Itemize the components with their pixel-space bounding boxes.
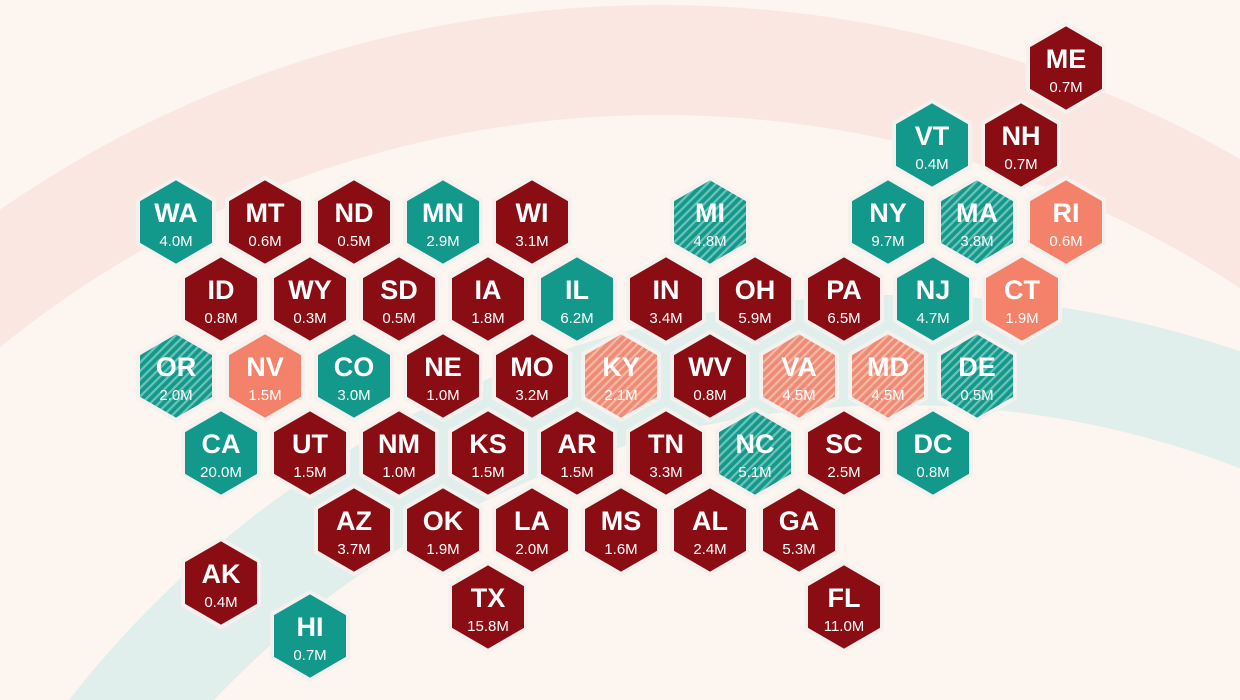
CA: CA xyxy=(202,429,240,459)
MA xyxy=(939,178,1015,266)
MA: 3.8M xyxy=(960,233,994,250)
GA: 5.3M xyxy=(782,541,816,558)
IL xyxy=(539,255,615,343)
RI: 0.6M xyxy=(1049,233,1083,250)
AK xyxy=(183,539,259,627)
NE xyxy=(405,332,481,420)
IA xyxy=(450,255,526,343)
MO: 3.2M xyxy=(515,387,549,404)
MS xyxy=(583,486,659,574)
CO: 3.0M xyxy=(337,387,371,404)
NJ xyxy=(895,255,971,343)
UT xyxy=(272,409,348,497)
MT: MT xyxy=(246,198,285,228)
MD: 4.5M xyxy=(871,387,905,404)
NJ: 4.7M xyxy=(916,310,950,327)
AK: AK xyxy=(202,559,241,589)
FL: 11.0M xyxy=(824,618,864,635)
MN: 2.9M xyxy=(426,233,460,250)
NM: NM xyxy=(378,429,420,459)
WA xyxy=(138,178,214,266)
NC: 5.1M xyxy=(738,464,772,481)
OK: OK xyxy=(423,506,464,536)
NE: 1.0M xyxy=(426,387,460,404)
ID xyxy=(183,255,259,343)
OK xyxy=(405,486,481,574)
CO: CO xyxy=(334,352,374,382)
DE: DE xyxy=(958,352,996,382)
DC xyxy=(895,409,971,497)
DE xyxy=(939,332,1015,420)
GA xyxy=(761,486,837,574)
KY xyxy=(583,332,659,420)
DC: 0.8M xyxy=(916,464,950,481)
SC: 2.5M xyxy=(827,464,861,481)
SD: 0.5M xyxy=(382,310,416,327)
WV: WV xyxy=(688,352,732,382)
LA: 2.0M xyxy=(515,541,549,558)
LA: LA xyxy=(514,506,550,536)
MI xyxy=(672,178,748,266)
MN: MN xyxy=(422,198,464,228)
TX: TX xyxy=(471,583,505,613)
TN xyxy=(628,409,704,497)
IN xyxy=(628,255,704,343)
MN xyxy=(405,178,481,266)
WY xyxy=(272,255,348,343)
NE: NE xyxy=(424,352,462,382)
IN: 3.4M xyxy=(649,310,683,327)
WI xyxy=(494,178,570,266)
MA: MA xyxy=(956,198,998,228)
WY: 0.3M xyxy=(293,310,327,327)
RI: RI xyxy=(1052,198,1080,228)
RI xyxy=(1028,178,1104,266)
NY: 9.7M xyxy=(871,233,905,250)
TX xyxy=(450,563,526,651)
DC: DC xyxy=(914,429,952,459)
MT: 0.6M xyxy=(248,233,282,250)
MS: 1.6M xyxy=(604,541,638,558)
CT: 1.9M xyxy=(1005,310,1039,327)
MI: MI xyxy=(695,198,725,228)
PA xyxy=(806,255,882,343)
SC: SC xyxy=(825,429,863,459)
AZ xyxy=(316,486,392,574)
VT: 0.4M xyxy=(915,156,949,173)
NC: NC xyxy=(736,429,774,459)
NV: 1.5M xyxy=(248,387,282,404)
NY: NY xyxy=(869,198,907,228)
IA: IA xyxy=(474,275,502,305)
NC xyxy=(717,409,793,497)
AL: 2.4M xyxy=(693,541,727,558)
VA: VA xyxy=(781,352,817,382)
TX: 15.8M xyxy=(467,618,509,635)
OH: 5.9M xyxy=(738,310,772,327)
HI xyxy=(272,592,348,680)
AR: AR xyxy=(558,429,596,459)
NY xyxy=(850,178,926,266)
SC xyxy=(806,409,882,497)
MT xyxy=(227,178,303,266)
KS xyxy=(450,409,526,497)
IN: IN xyxy=(652,275,680,305)
WA: 4.0M xyxy=(159,233,193,250)
AZ: AZ xyxy=(336,506,372,536)
OK: 1.9M xyxy=(426,541,460,558)
OH: OH xyxy=(735,275,775,305)
ID: 0.8M xyxy=(204,310,238,327)
VA: 4.5M xyxy=(782,387,816,404)
TN: TN xyxy=(648,429,684,459)
ME: ME xyxy=(1046,44,1086,74)
ME: 0.7M xyxy=(1049,79,1083,96)
CO xyxy=(316,332,392,420)
VT xyxy=(894,101,970,189)
NH: NH xyxy=(1002,121,1040,151)
hex map of states xyxy=(138,24,1104,680)
WV: 0.8M xyxy=(693,387,727,404)
VA xyxy=(761,332,837,420)
MO xyxy=(494,332,570,420)
WV xyxy=(672,332,748,420)
WY: WY xyxy=(288,275,332,305)
AR xyxy=(539,409,615,497)
NH xyxy=(983,101,1059,189)
MS: MS xyxy=(601,506,641,536)
LA xyxy=(494,486,570,574)
ME xyxy=(1028,24,1104,112)
NH: 0.7M xyxy=(1004,156,1038,173)
KY: KY xyxy=(602,352,640,382)
NM xyxy=(361,409,437,497)
OR xyxy=(138,332,214,420)
IL: IL xyxy=(565,275,589,305)
MD: MD xyxy=(867,352,909,382)
CT xyxy=(984,255,1060,343)
MI: 4.8M xyxy=(693,233,727,250)
VT: VT xyxy=(915,121,950,151)
MD xyxy=(850,332,926,420)
UT: UT xyxy=(292,429,328,459)
NV xyxy=(227,332,303,420)
DE: 0.5M xyxy=(960,387,994,404)
ID: ID xyxy=(208,275,234,305)
AR: 1.5M xyxy=(560,464,594,481)
FL: FL xyxy=(828,583,860,613)
UT: 1.5M xyxy=(293,464,327,481)
WA: WA xyxy=(154,198,198,228)
AZ: 3.7M xyxy=(337,541,371,558)
GA: GA xyxy=(779,506,819,536)
CT: CT xyxy=(1004,275,1040,305)
ND: ND xyxy=(334,198,374,228)
HI: 0.7M xyxy=(293,647,327,664)
ND xyxy=(316,178,392,266)
MO: MO xyxy=(510,352,554,382)
AL: AL xyxy=(692,506,728,536)
CA: 20.0M xyxy=(200,464,242,481)
TN: 3.3M xyxy=(649,464,683,481)
KS: 1.5M xyxy=(471,464,505,481)
CA xyxy=(183,409,259,497)
IA: 1.8M xyxy=(471,310,505,327)
KY: 2.1M xyxy=(604,387,638,404)
PA: PA xyxy=(826,275,862,305)
NV: NV xyxy=(246,352,284,382)
WI: WI xyxy=(516,198,548,228)
KS: KS xyxy=(469,429,507,459)
WI: 3.1M xyxy=(515,233,549,250)
NM: 1.0M xyxy=(382,464,416,481)
OH xyxy=(717,255,793,343)
SD: SD xyxy=(380,275,418,305)
FL xyxy=(806,563,882,651)
AK: 0.4M xyxy=(204,594,238,611)
HI: HI xyxy=(296,612,324,642)
IL: 6.2M xyxy=(560,310,594,327)
NJ: NJ xyxy=(916,275,950,305)
PA: 6.5M xyxy=(827,310,861,327)
OR: OR xyxy=(156,352,196,382)
OR: 2.0M xyxy=(159,387,193,404)
SD xyxy=(361,255,437,343)
AL xyxy=(672,486,748,574)
ND: 0.5M xyxy=(337,233,371,250)
